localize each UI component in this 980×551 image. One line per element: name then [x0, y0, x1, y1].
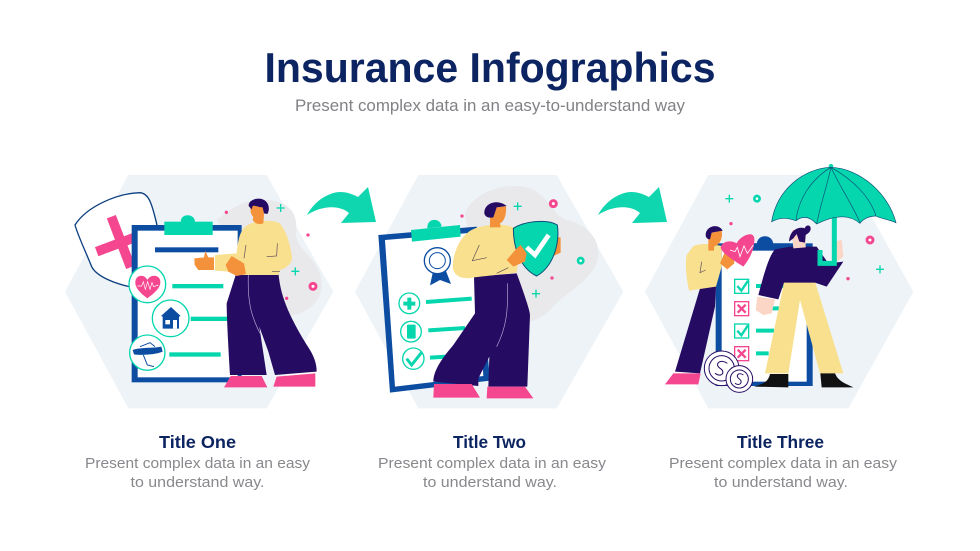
- caption: title three: Present complex data in an easy: [669, 456, 898, 472]
- icon: medical shield: [75, 193, 157, 288]
- person: [433, 202, 533, 398]
- panel: title two illustration: [355, 175, 623, 408]
- caption: title one: Title One: [159, 432, 236, 452]
- caption: title two: [378, 432, 607, 491]
- icon: umbrella: [772, 164, 896, 263]
- clipboard: [378, 220, 490, 393]
- panel: title three illustration: [645, 164, 913, 408]
- grey blob: [217, 200, 322, 317]
- hexagon background: [65, 175, 333, 408]
- caption: title two: to understand way.: [423, 475, 557, 491]
- caption: title two: Title Two: [453, 432, 526, 452]
- icon: coins: [704, 351, 753, 392]
- arrow one: [307, 187, 376, 223]
- icon: plane: [130, 335, 165, 370]
- sparkles: [225, 204, 316, 300]
- caption: title three: to understand way.: [714, 475, 848, 491]
- caption: title two: Present complex data in an easy: [378, 456, 607, 472]
- clipboard: [716, 236, 813, 386]
- icon: ribbon badge: [424, 248, 451, 285]
- woman with umbrella: [754, 225, 853, 387]
- icon: heart: [721, 234, 754, 267]
- caption: title one: to understand way.: [130, 475, 264, 491]
- caption: title one: Present complex data in an easy: [85, 456, 311, 472]
- man with heart: [665, 226, 734, 384]
- sparkles: [460, 201, 583, 298]
- arrow two: [598, 187, 667, 223]
- caption: title three: Title Three: [737, 432, 824, 452]
- hexagon background: [645, 175, 913, 408]
- checklist boxes: [735, 279, 749, 361]
- icon: house: [152, 300, 189, 337]
- hexagon background: [355, 175, 623, 408]
- grey blob: [465, 186, 598, 322]
- caption: title three: [669, 432, 898, 491]
- person: [194, 199, 317, 387]
- icon: check: [403, 348, 424, 369]
- icon: heart: [129, 266, 166, 303]
- icon: document: [401, 321, 421, 342]
- panel: title one illustration: [65, 175, 333, 408]
- subtitle: Present complex data in an easy-to-understand way: [295, 97, 686, 115]
- caption: title one: [85, 432, 311, 491]
- clipboard: [132, 215, 242, 382]
- icon: shield with check: [507, 221, 561, 276]
- icon: plus: [399, 293, 420, 314]
- title: Insurance Infographics: [264, 44, 716, 91]
- sparkles: [725, 195, 884, 280]
